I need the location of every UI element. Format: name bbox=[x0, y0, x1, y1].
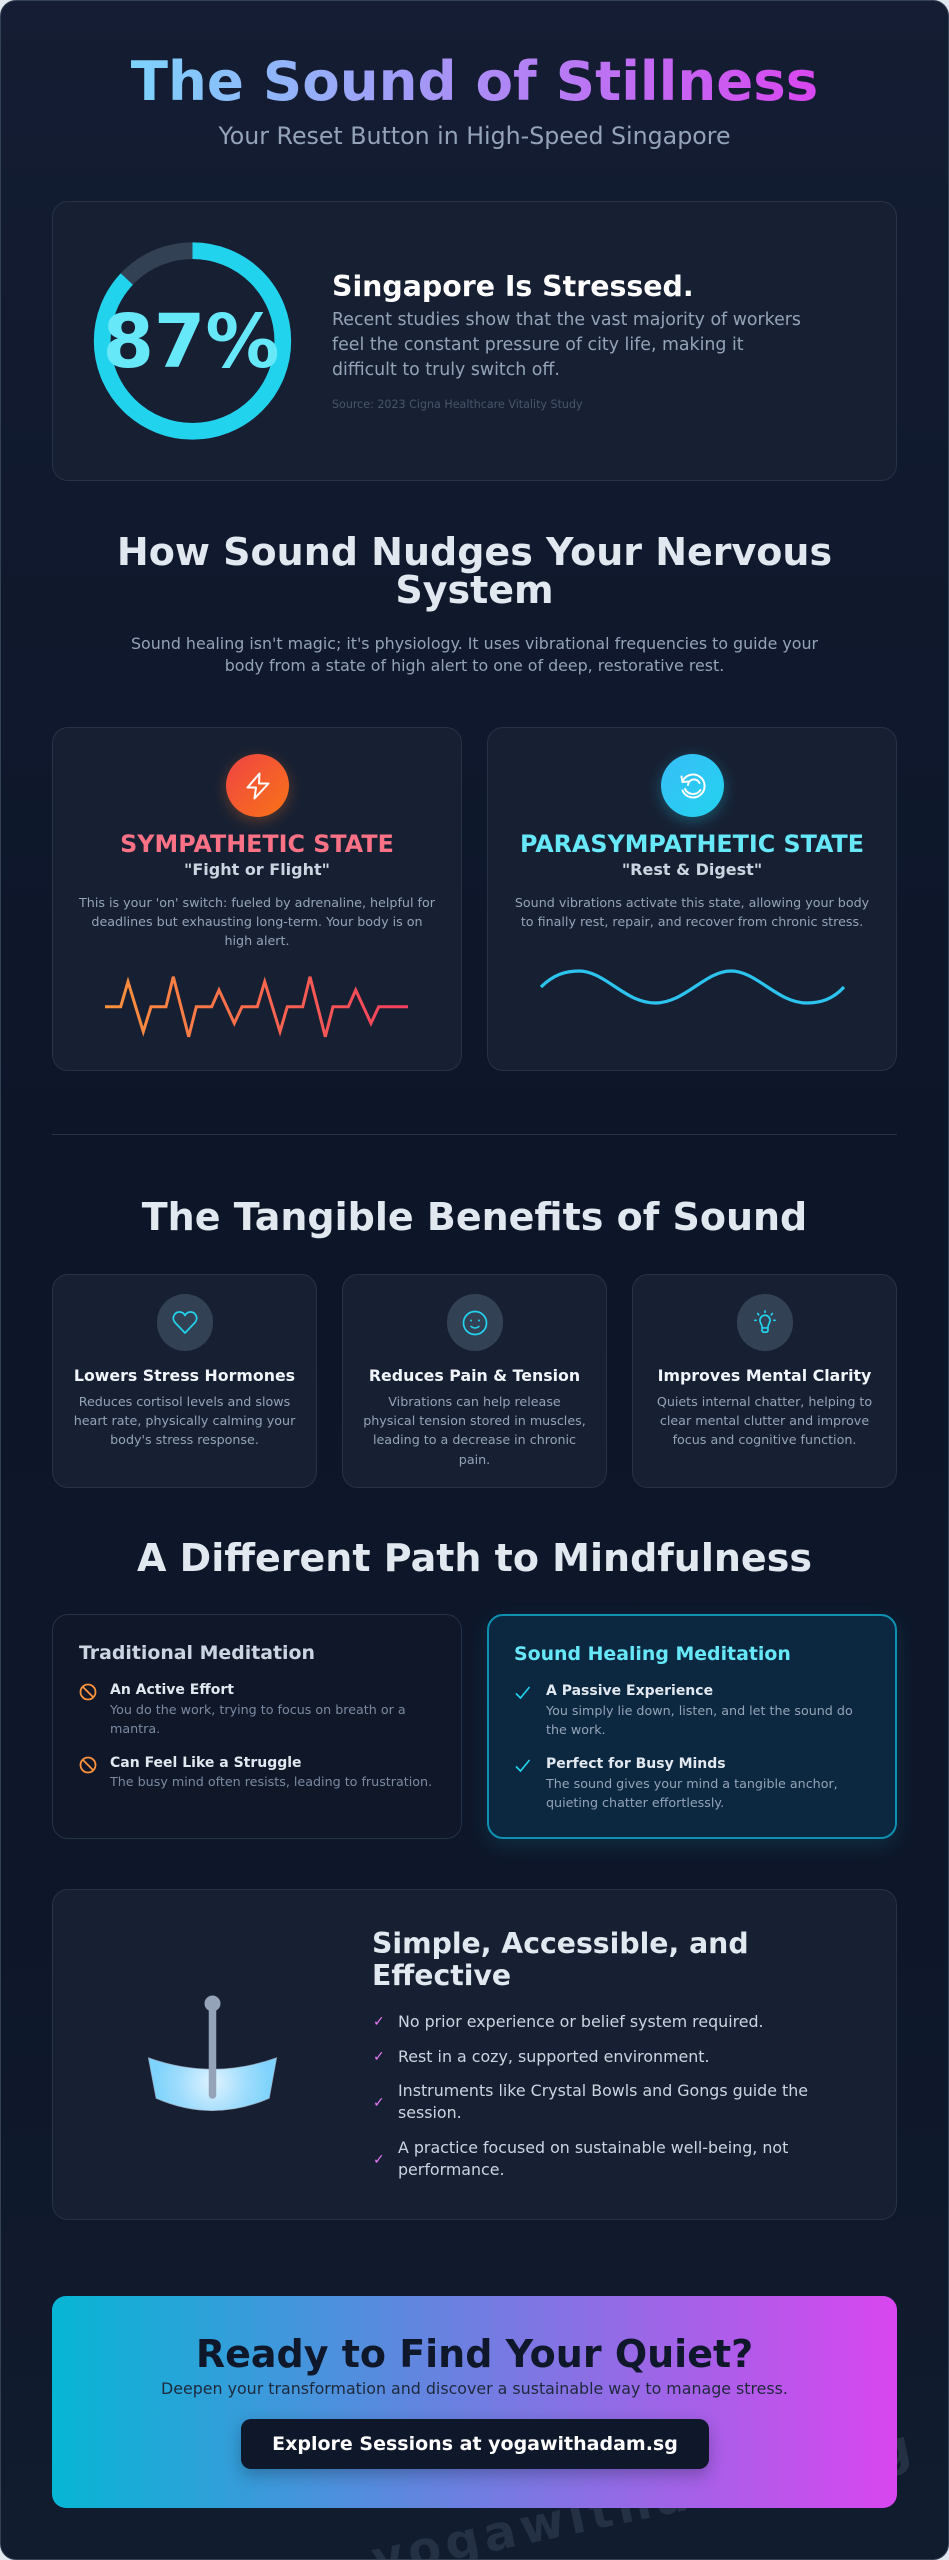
benefit title: Lowers Stress Hormones bbox=[74, 1366, 295, 1384]
panel: sympathetic state bbox=[52, 727, 462, 1071]
item: passive experience bbox=[516, 1682, 853, 1737]
state description: to finally rest, repair, and recover from chronic stress. bbox=[521, 914, 863, 929]
item: struggle bbox=[80, 1754, 432, 1789]
item text: You simply lie down, listen, and let the sound do bbox=[546, 1703, 853, 1718]
statistic description: feel the constant pressure of city life, making it bbox=[332, 335, 744, 355]
statistic value: 87% bbox=[102, 299, 280, 385]
panel: parasympathetic state bbox=[487, 727, 897, 1071]
state nickname: "Rest & Digest" bbox=[622, 860, 762, 879]
heading: benefits: The Tangible Benefits of Sound bbox=[142, 1195, 807, 1239]
benefit title: Improves Mental Clarity bbox=[658, 1366, 871, 1384]
state name: SYMPATHETIC STATE bbox=[120, 830, 394, 858]
benefit description: Vibrations can help release bbox=[388, 1394, 561, 1409]
benefit description: Reduces cortisol levels and slows bbox=[79, 1394, 290, 1409]
statistic description: Recent studies show that the vast majority of workers bbox=[332, 310, 801, 330]
statistic description: difficult to truly switch off. bbox=[332, 360, 560, 380]
list item: session. bbox=[398, 2103, 462, 2122]
button bbox=[241, 2419, 709, 2469]
item: active effort bbox=[80, 1682, 406, 1736]
call to action heading: Ready to Find Your Quiet? bbox=[196, 2332, 753, 2376]
benefit description bbox=[363, 1394, 586, 1467]
item title: Perfect for Busy Minds bbox=[546, 1756, 726, 1772]
heading: mindfulness: A Different Path to Mindfulness bbox=[137, 1536, 812, 1580]
icon: light bulb bbox=[736, 1294, 793, 1350]
state description: This is your 'on' switch: fueled by adrenaline, helpful for bbox=[79, 895, 435, 910]
benefit description: focus and cognitive function. bbox=[673, 1432, 856, 1447]
donut chart: 87% bbox=[94, 242, 292, 440]
title: The Sound of Stillness bbox=[131, 49, 818, 113]
panel title: Traditional Meditation bbox=[79, 1642, 315, 1664]
subtitle: Your Reset Button in High-Speed Singapore bbox=[218, 122, 731, 150]
benefits checklist: ✓ bbox=[373, 2014, 385, 2030]
icon: prohibited bbox=[80, 1756, 96, 1774]
statistic heading: Singapore Is Stressed. bbox=[332, 270, 694, 303]
benefit description: leading to a decrease in chronic bbox=[373, 1432, 576, 1447]
chart: erratic heartbeat line bbox=[105, 976, 408, 1038]
panel: call to action bbox=[52, 2296, 897, 2508]
list item bbox=[373, 2138, 788, 2179]
item text: The busy mind often resists, leading to frustration. bbox=[110, 1774, 432, 1789]
icon: lightning bolt bbox=[226, 754, 289, 817]
source note: Source: 2023 Cigna Healthcare Vitality Study bbox=[332, 398, 583, 411]
panel: simple and accessible bbox=[52, 1889, 897, 2220]
benefit description bbox=[657, 1394, 872, 1447]
panel heading: Simple, Accessible, and bbox=[372, 1927, 749, 1960]
icon: prohibited bbox=[80, 1684, 96, 1700]
nervous system description: Sound healing isn't magic; it's physiology. It uses vibrational frequencies to guide your bbox=[131, 634, 818, 653]
button: Explore Sessions at yogawithadam.sg bbox=[272, 2433, 678, 2455]
list item: Instruments like Crystal Bowls and Gongs guide the bbox=[398, 2081, 808, 2100]
panel: traditional meditation bbox=[52, 1614, 462, 1839]
benefits checklist: ✓ bbox=[373, 2049, 385, 2065]
benefits checklist: ✓ bbox=[373, 2152, 385, 2168]
state name: PARASYMPATHETIC STATE bbox=[520, 830, 864, 858]
state description: Sound vibrations activate this state, allowing your body bbox=[515, 895, 869, 910]
statistic description bbox=[332, 310, 801, 380]
item title: Can Feel Like a Struggle bbox=[110, 1754, 302, 1770]
icon: heart bbox=[156, 1294, 213, 1350]
panel: stress statistic bbox=[52, 201, 897, 481]
item text: You do the work, trying to focus on breath or a bbox=[110, 1702, 406, 1717]
state description: high alert. bbox=[224, 933, 290, 948]
icon: circular reset bbox=[660, 754, 724, 817]
item: busy minds bbox=[516, 1756, 838, 1810]
benefit description: clear mental clutter and improve bbox=[660, 1413, 869, 1428]
item text bbox=[546, 1776, 838, 1810]
nervous system description: body from a state of high alert to one of deep, restorative rest. bbox=[225, 656, 724, 675]
item title: A Passive Experience bbox=[546, 1682, 713, 1698]
list item: Rest in a cozy, supported environment. bbox=[398, 2047, 710, 2066]
benefit description: body's stress response. bbox=[110, 1432, 259, 1447]
list item: A practice focused on sustainable well-being, not bbox=[398, 2138, 788, 2157]
state description bbox=[78, 895, 435, 948]
item text bbox=[546, 1703, 853, 1737]
icon: check bbox=[516, 1686, 530, 1700]
nervous system description bbox=[131, 634, 818, 675]
item text: mantra. bbox=[110, 1721, 160, 1736]
icon: smiling face bbox=[446, 1294, 503, 1350]
benefit description: pain. bbox=[459, 1452, 490, 1467]
panel: mental clarity bbox=[632, 1274, 897, 1488]
panel title: Sound Healing Meditation bbox=[514, 1643, 791, 1665]
panel heading bbox=[372, 1927, 749, 1992]
heading: nervous system: System bbox=[395, 568, 554, 612]
panel: sound healing meditation bbox=[487, 1614, 897, 1839]
call to action text: Deepen your transformation and discover a sustainable way to manage stress. bbox=[161, 2379, 788, 2398]
benefits checklist: ✓ bbox=[373, 2095, 385, 2111]
list item bbox=[373, 2081, 808, 2122]
panel: reduces pain bbox=[342, 1274, 607, 1488]
item text: the work. bbox=[546, 1722, 606, 1737]
benefit description: heart rate, physically calming your bbox=[74, 1413, 295, 1428]
list item: performance. bbox=[398, 2160, 505, 2179]
benefit description: physical tension stored in muscles, bbox=[363, 1413, 586, 1428]
icon: check bbox=[516, 1760, 530, 1772]
item text bbox=[110, 1702, 406, 1736]
panel heading: Effective bbox=[372, 1959, 511, 1992]
heading: nervous system bbox=[117, 530, 832, 612]
state description bbox=[515, 895, 869, 929]
item title: An Active Effort bbox=[110, 1682, 234, 1698]
benefit description: Quiets internal chatter, helping to bbox=[657, 1394, 872, 1409]
state nickname: "Fight or Flight" bbox=[184, 860, 330, 879]
benefit description bbox=[74, 1394, 296, 1447]
chart: calm sine wave bbox=[540, 969, 846, 1005]
item text: quieting chatter effortlessly. bbox=[546, 1795, 724, 1810]
divider bbox=[52, 1134, 897, 1135]
benefit title: Reduces Pain & Tension bbox=[369, 1366, 580, 1384]
state description: deadlines but exhausting long-term. Your body is on bbox=[91, 914, 423, 929]
item text: The sound gives your mind a tangible anchor, bbox=[546, 1776, 838, 1791]
list item: No prior experience or belief system required. bbox=[398, 2012, 764, 2031]
panel: lower stress hormones bbox=[52, 1274, 317, 1488]
benefits checklist bbox=[373, 2012, 808, 2179]
heading: nervous system: How Sound Nudges Your Nervous bbox=[117, 530, 832, 574]
